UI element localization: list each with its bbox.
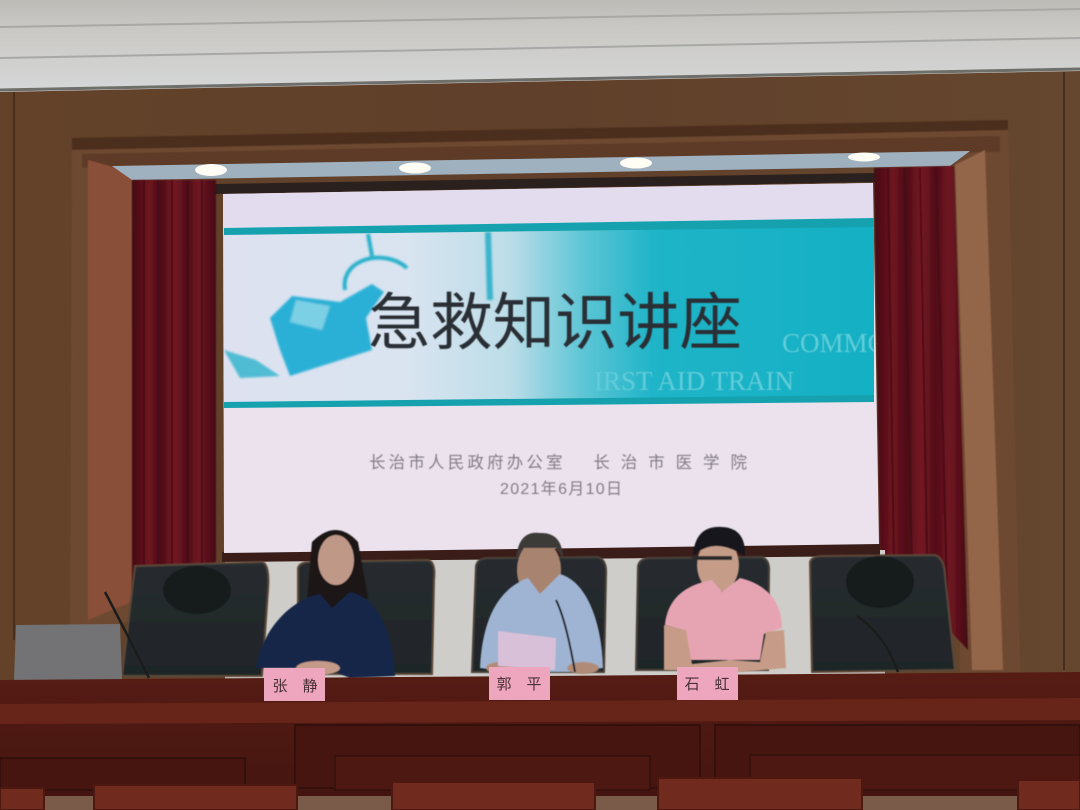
person: man right <box>664 527 786 672</box>
name card: 张静 <box>264 668 325 701</box>
name card: 石虹: 石 虹 <box>684 676 730 693</box>
projection screen <box>223 183 886 553</box>
left curtain <box>132 180 216 600</box>
screen organisers: 长治市人民政府办公室 长 治 市 医 学 院 <box>369 453 747 472</box>
recessed ceiling with lights <box>112 151 970 194</box>
name card: 郭平: 郭 平 <box>496 676 542 693</box>
chair backs <box>122 555 955 676</box>
wood wall <box>0 71 1080 680</box>
screen title: 急救知识讲座 <box>368 289 742 358</box>
faint English subtitle: IRST AID TRAIN <box>594 366 794 396</box>
faint English subtitle <box>596 334 874 391</box>
lower wall behind chairs <box>222 544 885 680</box>
laptop <box>14 624 122 680</box>
screen date: 2021年6月10日 <box>500 480 622 498</box>
person: man centre <box>480 533 603 674</box>
faint English subtitle: COMMC <box>782 328 886 358</box>
name card: 张静: 张 静 <box>272 678 318 695</box>
foreground seats <box>0 778 1080 810</box>
person: woman left <box>256 530 395 678</box>
icon: stethoscope and gloved hand <box>224 232 490 378</box>
name card: 石虹 <box>677 667 738 700</box>
screen teal band <box>224 218 874 408</box>
table <box>0 672 1080 810</box>
microphones <box>105 592 898 678</box>
name card: 郭平 <box>489 667 550 700</box>
stage frame <box>70 120 1020 672</box>
ceiling <box>0 0 1080 92</box>
right curtain <box>874 166 968 650</box>
